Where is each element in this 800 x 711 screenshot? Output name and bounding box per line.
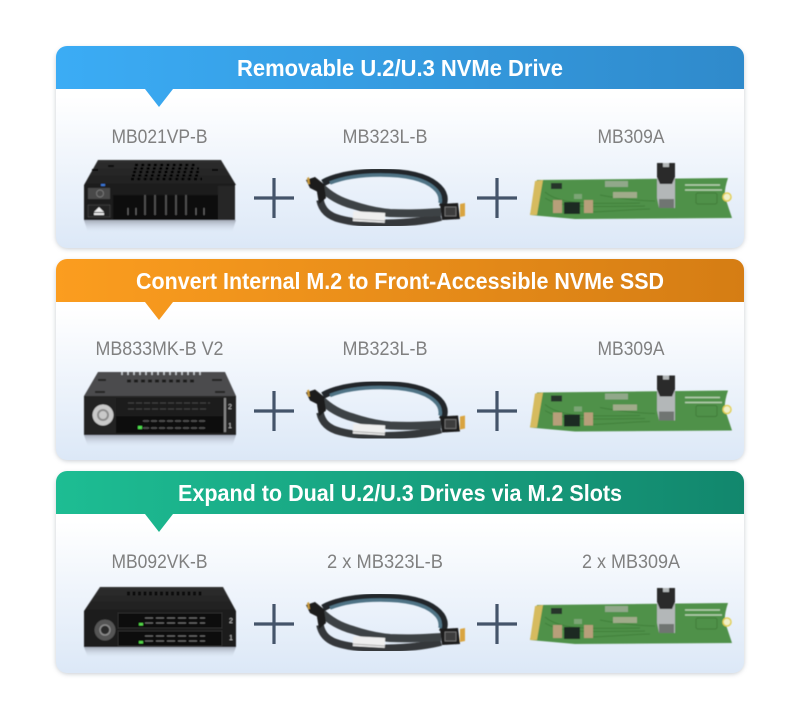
label: MB323L-B: MB323L-B xyxy=(342,127,428,148)
heading banner: green: Expand to Dual U.2/U.3 Drives via M.2 Slots xyxy=(178,480,622,506)
plus sign xyxy=(477,604,517,644)
heading banner: green xyxy=(56,471,744,532)
plus sign xyxy=(254,178,294,218)
panel: expand to dual U.2/U.3 drives via M.2 slots xyxy=(56,471,744,674)
device: MB833MK-B V2 enclosure xyxy=(84,372,236,447)
label: 2 x MB309A: 2 x MB309A xyxy=(582,552,680,573)
heading banner: orange: Convert Internal M.2 to Front-Accessible NVMe SSD xyxy=(136,268,664,294)
device: MB021VP-B enclosure xyxy=(84,160,236,233)
heading banner: orange xyxy=(56,259,744,320)
board: MB309A xyxy=(530,163,732,219)
device: MB833MK-B V2 enclosure: 1 xyxy=(228,423,232,430)
heading banner: blue: Removable U.2/U.3 NVMe Drive xyxy=(237,55,563,81)
label: MB309A: MB309A xyxy=(598,339,665,360)
label: MB833MK-B V2: MB833MK-B V2 xyxy=(96,339,224,360)
board: MB309A xyxy=(530,376,732,432)
label: MB092VK-B: MB092VK-B xyxy=(112,552,208,573)
label: MB323L-B: MB323L-B xyxy=(342,339,428,360)
device: MB833MK-B V2 enclosure: 2 xyxy=(228,404,232,411)
device: MB092VK-B enclosure: 2 xyxy=(229,618,233,625)
label: 2 x MB323L-B: 2 x MB323L-B xyxy=(327,552,443,573)
panel: convert internal M.2 to front-accessible NVMe SSD xyxy=(56,259,744,461)
label: MB309A: MB309A xyxy=(598,127,665,148)
cable: MB323L-B xyxy=(306,384,465,436)
cable: MB323L-B xyxy=(306,597,465,648)
label: MB021VP-B: MB021VP-B xyxy=(112,127,208,148)
plus sign xyxy=(254,604,294,644)
device: MB092VK-B enclosure xyxy=(84,587,236,658)
cable: MB323L-B xyxy=(306,172,465,223)
device: MB092VK-B enclosure: 1 xyxy=(229,635,233,642)
plus sign xyxy=(477,391,517,431)
plus sign xyxy=(477,178,517,218)
board: MB309A xyxy=(530,588,732,644)
plus sign xyxy=(254,391,294,431)
heading banner: blue xyxy=(56,46,744,107)
panel: removable U.2/U.3 NVMe drive xyxy=(56,46,744,249)
